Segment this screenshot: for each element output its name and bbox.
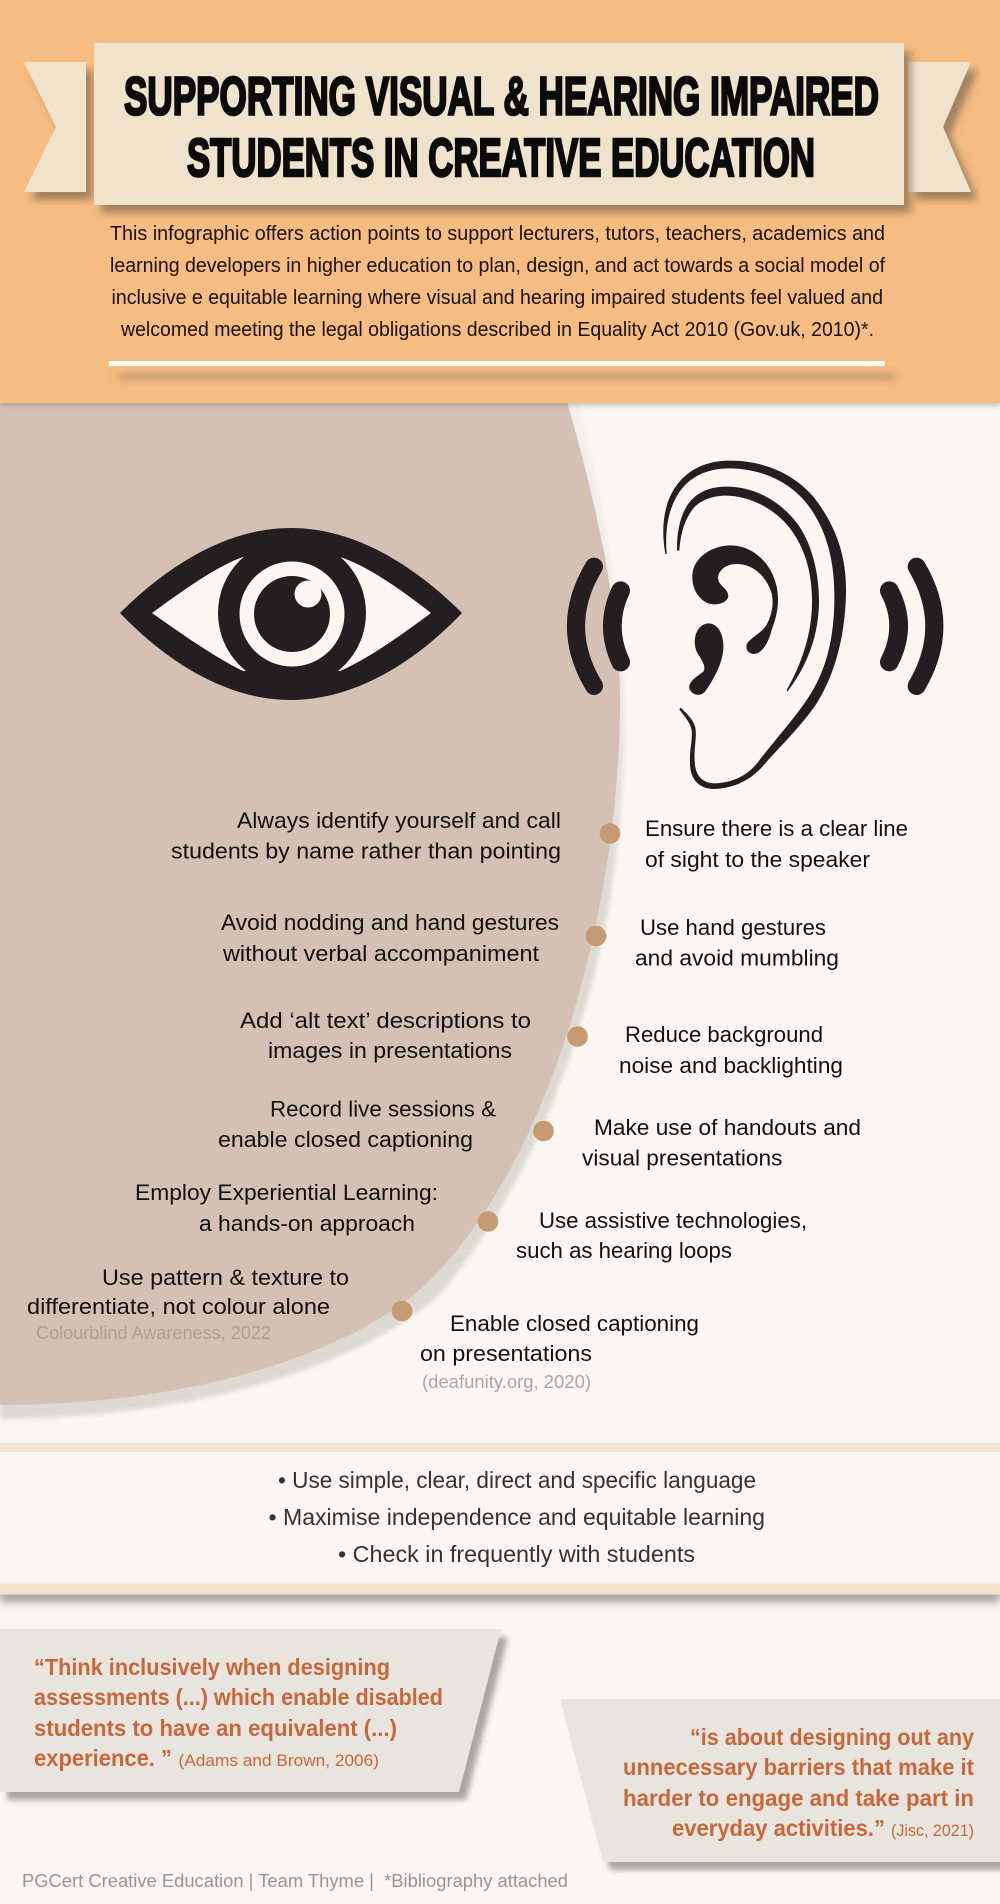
intro paragraph: welcomed meeting the legal obligations described in Equality Act 2010 (Gov.uk, 2010)*. — [120, 318, 874, 341]
general tips list — [268, 1467, 765, 1567]
point 4: visual presentations — [582, 1146, 782, 1170]
point 1: Always identify yourself and call — [237, 808, 561, 833]
point 3: Add ‘alt text’ descriptions to — [240, 1008, 531, 1033]
general tips list: • Maximise independence and equitable learning — [268, 1504, 765, 1530]
point 4: Make use of handouts and — [594, 1115, 861, 1140]
point 6: on presentations — [420, 1341, 592, 1366]
ribbon left wing — [24, 62, 86, 192]
title — [124, 66, 879, 188]
point 1: of sight to the speaker — [645, 847, 870, 872]
panel: quote left — [0, 1629, 501, 1792]
quote text right: everyday activities.” — [672, 1815, 885, 1841]
hearing impairment action points — [420, 816, 908, 1392]
ribbon right wing — [908, 62, 971, 192]
point 5: a hands-on approach — [199, 1211, 415, 1236]
footer credits: PGCert Creative Education | Team Thyme | *Bibliography attached — [22, 1871, 568, 1891]
header panel — [0, 0, 1000, 403]
intro paragraph: This infographic offers action points to support lecturers, tutors, teachers, academics and — [110, 222, 885, 245]
icon: ear with sound waves — [576, 461, 934, 789]
point 2 — [221, 910, 559, 966]
point 4: enable closed captioning — [218, 1127, 473, 1152]
timeline dots — [392, 823, 620, 1321]
quote text right: unnecessary barriers that make it — [623, 1754, 974, 1780]
point 6 — [420, 1311, 699, 1392]
point 5: such as hearing loops — [516, 1238, 732, 1263]
point 2: and avoid mumbling — [635, 946, 839, 970]
point 6: differentiate, not colour alone — [27, 1294, 330, 1319]
visual impairment action points — [27, 808, 561, 1343]
quote text left: “Think inclusively when designing — [34, 1654, 390, 1680]
ear outline — [663, 461, 846, 789]
point 3 — [619, 1022, 843, 1078]
point 6: Enable closed captioning — [450, 1311, 699, 1336]
point 2 — [635, 915, 839, 970]
point 3: Reduce background — [625, 1022, 823, 1047]
point 5: Employ Experiential Learning: — [135, 1180, 438, 1205]
panel: general tips strip — [0, 1443, 1000, 1594]
point 2: Avoid nodding and hand gestures — [221, 910, 559, 935]
quote text right: “is about designing out any — [690, 1724, 974, 1750]
point 6: (deafunity.org, 2020) — [422, 1372, 591, 1392]
point 1 — [171, 808, 561, 864]
point 4 — [582, 1115, 861, 1170]
quote text right: (Jisc, 2021) — [891, 1821, 974, 1840]
intro paragraph: learning developers in higher education to plan, design, and act towards a social model of — [110, 254, 885, 277]
point 1: Ensure there is a clear line — [645, 816, 908, 841]
quote text left: (Adams and Brown, 2006) — [178, 1751, 379, 1770]
point 5 — [516, 1208, 807, 1263]
title banner — [94, 43, 904, 205]
point 3: noise and backlighting — [619, 1053, 843, 1078]
point 6: Colourblind Awareness, 2022 — [36, 1323, 271, 1343]
general tips list: • Check in frequently with students — [338, 1541, 695, 1567]
point 1: students by name rather than pointing — [171, 838, 561, 864]
quote text left — [34, 1654, 443, 1771]
icon: eye — [120, 528, 462, 700]
point 3: images in presentations — [268, 1038, 512, 1063]
point 6: Use pattern & texture to — [102, 1265, 349, 1290]
point 5 — [135, 1180, 438, 1236]
sound waves — [576, 567, 934, 686]
white rule — [109, 361, 885, 366]
quote text left: experience. ” — [34, 1745, 172, 1771]
intro paragraph: inclusive e equitable learning where visual and hearing impaired students feel valued and — [112, 286, 883, 309]
quote text right: harder to engage and take part in — [623, 1785, 974, 1811]
point 3 — [240, 1008, 531, 1063]
quote text left: assessments (...) which enable disabled — [34, 1684, 443, 1710]
point 6 — [27, 1265, 349, 1343]
point 4 — [218, 1096, 496, 1152]
point 5: Use assistive technologies, — [539, 1208, 807, 1233]
point 1 — [645, 816, 908, 872]
point 4: Record live sessions & — [270, 1096, 496, 1122]
quote text right — [623, 1724, 974, 1841]
point 2: without verbal accompaniment — [222, 941, 539, 966]
quote text left: students to have an equivalent (...) — [34, 1715, 397, 1741]
panel: quote right — [560, 1699, 1000, 1862]
background panel: visual impairment curved shape — [0, 395, 624, 1419]
point 2: Use hand gestures — [640, 915, 826, 940]
general tips list: • Use simple, clear, direct and specific language — [278, 1467, 756, 1493]
intro paragraph — [110, 222, 885, 341]
